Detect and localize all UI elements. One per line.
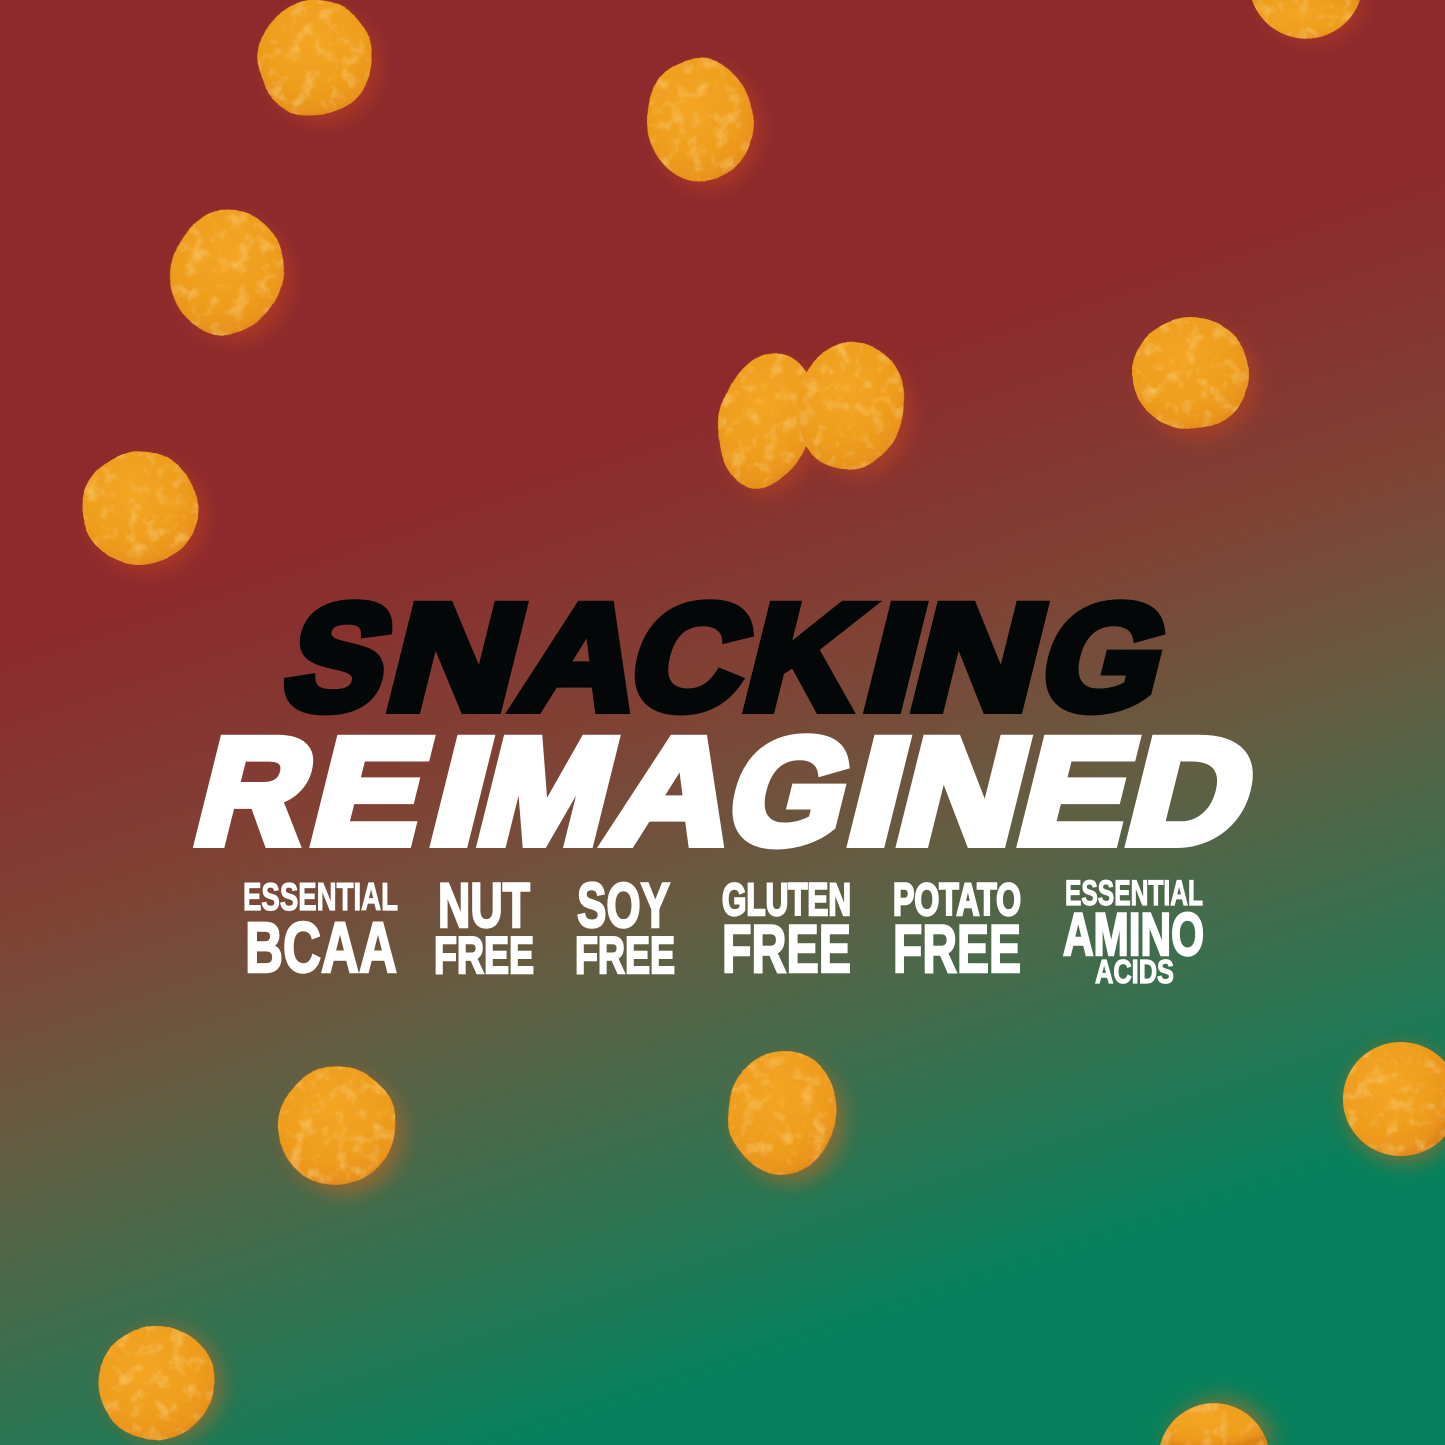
title: SNACKING: I [850, 574, 942, 741]
title: REIMAGINED: A [594, 708, 756, 875]
title: SNACKING: G [1026, 574, 1186, 741]
snack puff: bottom right, cropped [1160, 1398, 1276, 1445]
title: SNACKING: N [897, 574, 1063, 741]
claim: potato free: FREE [893, 911, 1021, 987]
claim: nut free [434, 871, 534, 985]
claim: essential amino acids: ESSENTIAL [1065, 874, 1203, 913]
snack puff: top centre [644, 55, 761, 190]
title: REIMAGINED: I [416, 708, 508, 875]
claim: gluten free: FREE [722, 911, 851, 987]
snack puff: lower left [265, 1053, 409, 1199]
snack puff: bottom left [98, 1326, 222, 1442]
snack puff: lower right, cropped [1343, 1042, 1445, 1163]
title: SNACKING [270, 574, 1186, 741]
title: REIMAGINED [181, 708, 1273, 875]
title: SNACKING: N [373, 574, 542, 741]
claim: nut free: NUT [438, 871, 530, 941]
claim: essential BCAA [243, 876, 398, 988]
title: REIMAGINED: D [1112, 708, 1273, 875]
claim: essential BCAA: BCAA [245, 909, 397, 988]
claim: essential BCAA: ESSENTIAL [243, 876, 398, 919]
title: SNACKING: A [502, 574, 662, 741]
claim: nut free: FREE [434, 927, 534, 985]
title: REIMAGINED: E [297, 708, 447, 875]
snack puff: right [1133, 318, 1257, 438]
title: REIMAGINED: I [833, 708, 925, 875]
snack puff: lower centre [723, 1047, 844, 1183]
title: SNACKING: C [615, 574, 769, 741]
claim: essential amino acids: ACIDS [1095, 953, 1174, 990]
title: REIMAGINED: G [713, 708, 870, 875]
snack puff: upper left [153, 194, 301, 350]
claim: soy free: FREE [575, 927, 675, 985]
claim: soy free: SOY [577, 871, 670, 941]
title: SNACKING: S [270, 574, 410, 741]
claim: potato free [893, 874, 1021, 987]
claim: gluten free [722, 874, 851, 987]
title: REIMAGINED: E [1004, 708, 1153, 875]
snack puff: middle left [82, 451, 206, 573]
claim: potato free: POTATO [893, 874, 1021, 925]
snack puffs: overlapping pair [705, 336, 912, 505]
claim: soy free [575, 871, 675, 985]
title: SNACKING: K [730, 574, 882, 741]
claim: essential amino acids [1063, 874, 1204, 990]
snack puff: top right, cropped [1252, 0, 1368, 43]
title: REIMAGINED: M [464, 708, 633, 875]
claim: essential amino acids: AMINO [1063, 901, 1204, 968]
snack puff: top left [239, 0, 391, 135]
title: REIMAGINED: R [181, 708, 331, 875]
title: REIMAGINED: N [883, 708, 1046, 875]
claim: gluten free: GLUTEN [722, 874, 851, 925]
